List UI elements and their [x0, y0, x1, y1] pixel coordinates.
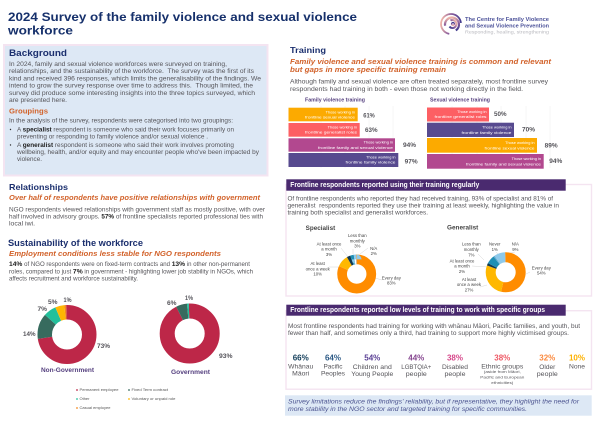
- chart: generalist donut: 1%: [492, 247, 498, 252]
- chart: family violence training bars: Family violence training: [305, 98, 365, 104]
- chart: sexual violence training bars: frontline family and sexual violence: [466, 162, 541, 166]
- text block: groupings: In the analysis of the survey, respondents were categorised into two groupings:: [9, 119, 233, 125]
- text block: relationships: half involved in advisory groups. 57% of frontline specialists reported professional ties with: [9, 214, 263, 220]
- stat: Older people: Older: [539, 364, 556, 371]
- chart: sexual violence training bars: frontline family violence: [462, 130, 512, 135]
- chart: sexual violence training bars: 50%: [494, 111, 507, 118]
- chart: non-government donut: 1%: [64, 297, 72, 304]
- text block: training use: Of frontline respondents who reported they had received training, 93% of specialist and 81% of: [288, 197, 553, 203]
- logo: The Centre for Family Violence: [465, 17, 549, 23]
- chart: family violence training bars: 94%: [403, 142, 417, 149]
- logo: and Sexual Violence Prevention: [465, 24, 549, 30]
- text block: specific groups: [288, 324, 580, 337]
- chart: family violence training bars: frontline family and sexual violence: [318, 145, 393, 150]
- text block: background intro: kind and received 396 responses, which limits the generalisability of the findings. We: [9, 76, 262, 82]
- text block: relationships: local iwi.: [9, 222, 35, 228]
- chart: generalist donut: monthly: [464, 247, 480, 252]
- callout: survey limitations: [285, 395, 592, 416]
- text block: training use: training both specialist and generalist workforces.: [288, 211, 428, 217]
- panel: background: [4, 45, 268, 176]
- chart: generalist donut: 2%: [459, 269, 465, 274]
- stat: Pacific Peoples: 64%: [325, 354, 341, 363]
- section: relationships: [9, 182, 265, 228]
- text block: background intro: In 2024, family and sexual violence workforces were surveyed on training,: [9, 62, 227, 68]
- chart: generalist donut: Generalist: [447, 226, 478, 232]
- text block: background intro: survey did produce some interesting insights into the three topics surveyed, which: [9, 91, 255, 97]
- chart: generalist donut: At least: [462, 277, 477, 282]
- chart: sexual violence training bars: Those working in: [482, 124, 512, 130]
- chart: specialist donut: N/A: [370, 246, 377, 251]
- chart: family violence training bars: frontline family violence: [346, 160, 396, 165]
- text block: training use: generalist respondents reported they use their training at least weekly, highlighting the value in: [288, 204, 559, 210]
- subheading: relationships: Over half of respondents have positive relationships with government: [9, 193, 261, 202]
- chart: generalist donut: N/A: [512, 242, 519, 247]
- chart: family violence training bars: frontline sexual violence: [305, 114, 355, 120]
- stat: None: None: [569, 363, 585, 370]
- subheading: training: [290, 57, 552, 74]
- chart: family violence training bars: [288, 98, 418, 168]
- stat: Children and Young People: [351, 354, 394, 378]
- chart: family violence training bars: Those working in: [366, 155, 396, 160]
- legend: employment type: Voluntary or unpaid role: [132, 397, 176, 401]
- chart: non-government donut: 5%: [48, 299, 58, 306]
- stat: Whānau Māori: Whānau: [288, 363, 314, 370]
- chart: generalist donut: Every day: [532, 265, 552, 270]
- logo: Responding, healing, strengthening: [465, 30, 549, 36]
- chart: generalist donut: [447, 226, 552, 292]
- chart: non-government donut: Non-Government: [41, 367, 94, 374]
- stat: LGBTQIA+ people: 44%: [408, 354, 424, 363]
- stat: Children and Young People: Children and: [353, 364, 392, 371]
- chart: specialist donut: monthly: [350, 238, 366, 243]
- panel header: specific groups: Frontline respondents reported low levels of training to work with specific groups: [290, 305, 545, 314]
- chart: specialist donut: 3%: [326, 252, 332, 257]
- chart: sexual violence training bars: Those working in: [512, 156, 541, 161]
- chart: generalist donut: 27%: [465, 287, 473, 292]
- chart: family violence training bars: Those working in: [364, 140, 393, 144]
- section: training: [290, 45, 552, 93]
- text block: specific groups: fewer than half, and sometimes only a third, had training to support more highly victimised groups.: [288, 331, 569, 337]
- chart: sexual violence training bars: [427, 98, 563, 169]
- chart: family violence training bars: Those working in: [328, 124, 357, 130]
- chart: specialist donut: Every day: [382, 275, 402, 280]
- logo: [439, 12, 549, 36]
- stat: Older people: [537, 354, 558, 378]
- section: sustainability: [8, 238, 253, 282]
- chart: generalist donut: Never: [489, 242, 501, 247]
- text block: sustainability: affects recruitment and workforce sustainability.: [9, 276, 138, 282]
- legend: employment type: [76, 388, 176, 410]
- chart: specialist donut: Specialist: [306, 226, 335, 232]
- chart: family violence training bars: Those working in: [326, 110, 355, 114]
- stat: None: [569, 354, 585, 370]
- panel header: training use: Frontline respondents reported using their training regularly: [290, 180, 479, 189]
- chart: government donut: Government: [171, 369, 210, 376]
- chart: specialist donut: 83%: [387, 281, 396, 286]
- chart: specialist donut: 2%: [371, 251, 377, 256]
- stat: Pacific Peoples: [321, 354, 345, 377]
- subheading: training: Family violence and sexual violence training is common and relevant: [290, 57, 552, 66]
- text block: training: [290, 80, 548, 93]
- stat: Ethnic groups: ethnicities): [491, 381, 514, 385]
- text block: groupings: [9, 119, 259, 163]
- chart: non-government donut: 7%: [38, 306, 48, 313]
- chart: sexual violence training bars: 70%: [522, 127, 536, 134]
- text block: sustainability: 14% of NGO respondents were on fixed-term contracts and 13% in other non-permanent: [9, 261, 250, 268]
- stat: Children and Young People: 54%: [364, 354, 380, 363]
- text block: background intro: [9, 62, 262, 104]
- stat: Whānau Māori: Māori: [292, 370, 309, 377]
- chart: generalist donut: 7%: [468, 252, 475, 257]
- stat: Ethnic groups: Pacific and European: [480, 375, 524, 379]
- text block: groupings: A specialist respondent is someone who said their work focuses primarily on: [17, 128, 234, 134]
- stat: Ethnic groups: Ethnic groups: [481, 363, 523, 370]
- panel: specific groups training: [286, 305, 592, 389]
- chart: specialist donut: At least once: [317, 241, 342, 246]
- stat: Older people: people: [537, 371, 558, 378]
- heading: training: Training: [290, 45, 326, 55]
- heading: sustainability: Sustainability of the workforce: [8, 238, 143, 248]
- text block: relationships: NGO respondents viewed relationships with government staff as mostly positive, with over: [9, 208, 265, 214]
- text block: sustainability: [9, 261, 253, 282]
- text block: groupings: wellbeing, health, and/or equity and may encounter people who've been impacted by: [16, 150, 259, 156]
- stat: Disabled people: 38%: [447, 354, 463, 363]
- text block: training: respondents had training in both - even those not working directly in the field.: [290, 87, 523, 93]
- stat: Disabled people: people: [444, 371, 466, 378]
- chart: specialist donut: At least: [311, 261, 326, 266]
- panel header: training use: [286, 179, 566, 191]
- chart: family violence training bars: 97%: [405, 159, 418, 166]
- chart: generalist donut: 9%: [512, 247, 519, 252]
- chart: generalist donut: a month: [454, 264, 470, 269]
- icon: spiral: [439, 12, 463, 36]
- title: workforce: [7, 24, 73, 38]
- callout: survey limitations: Survey limitations reduce the findings' reliability, but if representative, they highlight the need for: [288, 398, 580, 406]
- legend: employment type: Casual employee: [80, 406, 111, 410]
- text block: groupings: preventing or responding to family violence and/or sexual violence .: [17, 134, 208, 140]
- text block: groupings: A generalist respondent is someone who said their work involves promoting: [17, 143, 234, 149]
- text block: sustainability: roles, compared to just 7% in government - highlighting lower job stability in NGOs, which: [9, 268, 253, 276]
- stat: Disabled people: [442, 354, 468, 378]
- stat: LGBTQIA+ people: people: [406, 371, 427, 378]
- stat: Ethnic groups: [480, 354, 524, 385]
- stat: Ethnic groups: 38%: [494, 354, 510, 363]
- subheading: sustainability: Employment conditions less stable for NGO respondents: [9, 249, 221, 258]
- chart: government donut: 1%: [185, 295, 193, 302]
- panel: training use: [286, 179, 592, 296]
- chart: sexual violence training bars: Those working in: [457, 109, 486, 114]
- legend: employment type: Other: [80, 397, 90, 401]
- chart: specialist donut: 10%: [313, 272, 322, 277]
- chart: sexual violence training bars: Those working in: [505, 140, 534, 145]
- chart: sexual violence training bars: 89%: [545, 142, 558, 149]
- chart: non-government donut: 14%: [23, 331, 36, 338]
- text block: relationships: [9, 208, 265, 228]
- chart: family violence training bars: frontline generalist roles: [305, 130, 357, 135]
- stat: Older people: 32%: [539, 354, 555, 363]
- chart: sexual violence training bars: 94%: [549, 158, 563, 165]
- subheading: training: but gaps in more specific training remain: [290, 65, 447, 74]
- stat: LGBTQIA+ people: LGBTQIA+: [401, 364, 432, 371]
- text block: background intro: relationships, and the sustainability of the workforce. The survey was the first of its: [9, 69, 254, 75]
- stat: Children and Young People: Young People: [351, 371, 394, 378]
- chart: specialist donut: [306, 226, 402, 289]
- chart: non-government donut: 73%: [97, 343, 111, 350]
- chart: specialist donut: 3%: [354, 244, 361, 249]
- stat: None: 10%: [569, 354, 585, 363]
- legend: employment type: Permanent employee: [80, 388, 119, 392]
- stat: Disabled people: Disabled: [442, 364, 468, 371]
- chart: sexual violence training bars: frontline sexual violence: [484, 146, 534, 150]
- callout: survey limitations: more stability in the NGO sector and targeted training for specific communities.: [288, 406, 527, 413]
- chart: specialist donut: Less than: [348, 233, 367, 238]
- stat: Whānau Māori: 66%: [293, 354, 309, 363]
- title: 2024 Survey of the family violence and sexual violence: [8, 10, 357, 24]
- chart: sexual violence training bars: Sexual violence training: [430, 98, 490, 104]
- heading: relationships: Relationships: [9, 182, 68, 192]
- stat: Ethnic groups: (aside from Māori,: [484, 370, 521, 374]
- chart: government donut: 6%: [167, 300, 177, 307]
- chart: government donut: 93%: [219, 353, 233, 360]
- chart: generalist donut: Less than: [462, 242, 481, 247]
- chart: non-government donut: [23, 297, 111, 374]
- chart: specialist donut: once a week: [306, 266, 331, 271]
- legend: employment type: Fixed Term contract: [132, 388, 168, 392]
- stat: LGBTQIA+ people: [401, 354, 432, 378]
- chart: generalist donut: once a week: [457, 282, 482, 287]
- stat: Whānau Māori: [288, 354, 314, 377]
- chart: government donut: [167, 295, 233, 376]
- text block: background intro: intend to grow the survey response over time to address this. Though limited, the: [9, 84, 254, 90]
- text block: training: Although family and sexual violence are often treated separately, most frontline survey: [290, 80, 548, 86]
- text block: specific groups: Most frontline respondents had training for working with whānau Māori, Pacific families, and youth, but: [288, 324, 580, 330]
- stat: Pacific Peoples: Pacific: [324, 363, 343, 370]
- stat: Pacific Peoples: Peoples: [321, 370, 345, 377]
- text block: training use: [288, 197, 559, 217]
- chart: sexual violence training bars: frontline generalist roles: [434, 114, 487, 119]
- heading: groupings: Groupings: [9, 108, 48, 116]
- chart: generalist donut: At least once: [450, 258, 475, 263]
- chart: family violence training bars: 61%: [363, 112, 375, 119]
- chart: specialist donut: a month: [321, 247, 337, 252]
- heading: background: Background: [9, 48, 67, 58]
- text block: background intro: are presented here.: [9, 98, 67, 104]
- chart: family violence training bars: 63%: [365, 127, 378, 134]
- chart: generalist donut: 54%: [537, 271, 546, 276]
- text block: groupings: violence.: [17, 157, 42, 163]
- title: [7, 10, 357, 38]
